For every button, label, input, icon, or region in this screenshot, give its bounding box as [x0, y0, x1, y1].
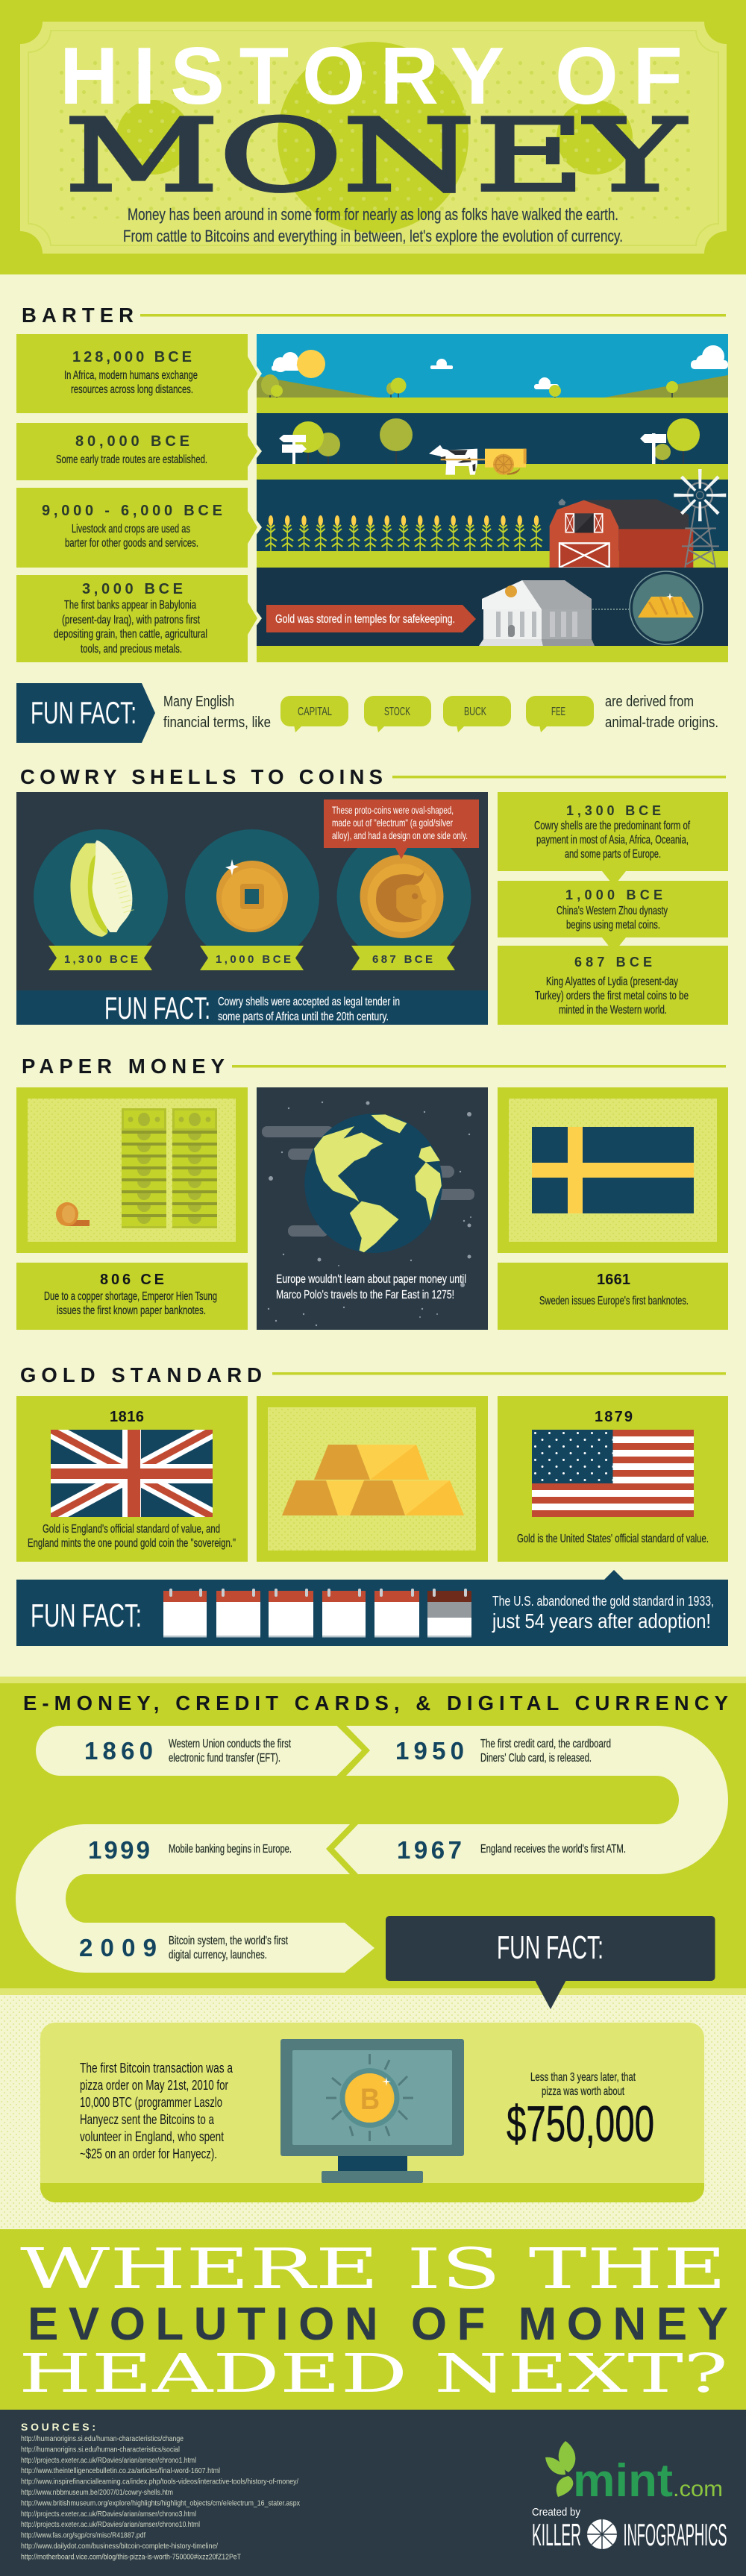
sources: SOURCES: [21, 2421, 95, 2433]
sources: http://humanorigins.si.edu/human-characteristics/social [21, 2445, 180, 2454]
caption [276, 1273, 466, 1301]
cream page background [0, 274, 746, 1677]
milestone: 1967: England receives the world's first ATM. [480, 1843, 626, 1856]
description [65, 523, 198, 550]
logo: Killer Infographics: Created by [532, 2506, 580, 2519]
milestone: 1950: Diners' Club card, is released. [480, 1752, 592, 1765]
sources: http://www.theintelligencebulletin.co.za/articles/final-word-1607.html [21, 2466, 220, 2475]
description: China's Western Zhou dynasty [557, 905, 668, 917]
icon: calendar row [163, 1589, 471, 1638]
fun fact: animal-trade terms: FUN FACT: [31, 695, 137, 730]
callout: gold stored in temples: Gold was stored in temples for safekeeping. [275, 613, 455, 626]
intro text: From cattle to Bitcoins and everything in between, let's explore the evolution of currency. [123, 227, 623, 245]
logo: mint.com: mint [573, 2455, 673, 2507]
ribbon: 687 BCE [351, 946, 455, 970]
heading: Gold standard: GOLD STANDARD [20, 1363, 262, 1386]
milestone: 1967: 1967 [397, 1836, 462, 1864]
milestone: 1999: 1999 [88, 1836, 150, 1864]
year: 687 BCE [574, 955, 652, 970]
description: depositing grain, then cattle, agricultural [54, 628, 207, 641]
intro text [123, 205, 623, 245]
term bubble: buck: BUCK [464, 706, 486, 718]
year: 80,000 BCE [75, 433, 189, 450]
sources: http://humanorigins.si.edu/human-characteristics/change [21, 2434, 184, 2443]
logo: Killer Infographics [532, 2506, 727, 2552]
fun fact: animal-trade terms: financial terms, like [163, 714, 271, 731]
milestone: 1967 [397, 1836, 626, 1864]
description: Some early trade routes are established. [56, 453, 207, 466]
sources: http://www.nbbmuseum.be/2007/01/cowry-shells.htm [21, 2488, 173, 2497]
sources: http://projects.exeter.ac.uk/RDavies/arian/amser/chrono10.html [21, 2520, 200, 2529]
fun fact: animal-trade terms: animal-trade origins. [605, 714, 718, 731]
fun fact: animal-trade terms [16, 683, 718, 743]
heading: E-money: E-MONEY, CREDIT CARDS, & DIGITAL CURRENCY [23, 1691, 728, 1715]
closing banner [0, 2229, 746, 2410]
banknote background [20, 22, 727, 254]
footer [0, 2410, 746, 2576]
panel: 1661: Sweden issues Europe's first banknotes. [539, 1295, 689, 1307]
text: pizza value [507, 2071, 654, 2152]
icon: square-hole coin [185, 829, 319, 964]
panel: 806 CE: Due to a copper shortage, Emperor Hien Tsung [44, 1290, 217, 1303]
year: 1,300 BCE [566, 803, 661, 818]
panel: 128,000 BCE [16, 334, 262, 413]
caption: Marco Polo's travels to the Far East in 1275! [276, 1289, 454, 1301]
callout: proto-coins: made out of "electrum" (a gold/silver [332, 817, 453, 829]
sources [21, 2421, 301, 2562]
panel: 1816 England: 1816 [110, 1409, 144, 1425]
header banner [0, 0, 746, 274]
logo: Killer Infographics: KILLER [532, 2517, 581, 2552]
panel: 806 CE: 806 CE [100, 1272, 164, 1288]
sources: http://motherboard.vice.com/blog/this-pizza-is-worth-750000#ixzz20fZ12PeT [21, 2553, 241, 2562]
text: first transaction [80, 2061, 233, 2161]
snake path [16, 1726, 728, 1973]
panel: Marco Polo globe [257, 1087, 488, 1330]
icon: trees [261, 374, 678, 398]
icon: gold vault circle [630, 571, 703, 644]
text: where is the: WHERE IS THE [20, 2236, 727, 2302]
logo: mint.com [545, 2441, 723, 2507]
icon: paper roll [56, 1202, 90, 1226]
icon: trees [292, 418, 700, 464]
fun fact: animal-trade terms: are derived from [605, 694, 694, 710]
milestone: 1860 [84, 1737, 291, 1765]
panel: cowry shells and coins [16, 792, 488, 1025]
icon: sun and clouds [272, 345, 728, 389]
text: first transaction: pizza order on May 21st, 2010 for [80, 2078, 228, 2093]
year: 1,000 BCE [565, 888, 662, 902]
icon: banknote stacks [122, 1108, 217, 1228]
heading: Paper money: PAPER MONEY [22, 1055, 225, 1078]
year: 9,000 - 6,000 BCE [42, 503, 222, 519]
panel: barter scene 128,000 BCE [257, 334, 728, 413]
description: Cowry shells are the predominant form of [534, 820, 691, 832]
term bubble: stock [364, 696, 431, 732]
milestone: 1950: The first credit card, the cardboard [480, 1738, 611, 1750]
description: (present-day Iraq), with patrons first [62, 614, 201, 626]
icon: cloud bars [262, 1126, 474, 1237]
description [64, 369, 198, 396]
term bubble: fee: FEE [551, 706, 565, 718]
term bubble: buck [443, 696, 511, 732]
ribbon: 1,300 BCE [48, 946, 152, 970]
sources: http://www.inspirefinanciallearning.ca/index.php/tools-videos/interactive-tools/history-of-money/ [21, 2478, 298, 2487]
icon: barn and windmill [550, 469, 726, 568]
logo: mint.com: .com [673, 2477, 723, 2501]
fun fact: gold standard abandoned: just 54 years after adoption! [492, 1609, 711, 1633]
ribbon: 687 BCE: 687 BCE [372, 953, 433, 966]
title: History of: HISTORY OF [60, 31, 683, 122]
fun fact: gold standard abandoned [16, 1570, 728, 1646]
panel: pizza bitcoin story [40, 2023, 704, 2202]
heading: Cowry shells to coins [20, 765, 726, 788]
milestone: 1860: 1860 [84, 1737, 153, 1765]
panel: 1661 [498, 1263, 728, 1330]
year: 3,000 BCE [82, 581, 183, 597]
icon: globe [304, 1113, 442, 1253]
panel: 1816 England: England mints the one pound gold coin the "sovereign." [28, 1537, 236, 1550]
ribbon: 1,000 BCE [200, 946, 304, 970]
panel: banknotes illustration [16, 1087, 248, 1253]
fun fact: speech bubble: FUN FACT: [497, 1929, 604, 1966]
icon: monitor with bitcoin: B [360, 2083, 380, 2116]
milestone: 2009 [79, 1934, 289, 1961]
panel: barter scene 3,000 BCE [257, 568, 728, 662]
milestone: 1999: Mobile banking begins in Europe. [169, 1843, 292, 1856]
callout: proto-coins: These proto-coins were oval-shaped, [332, 804, 454, 816]
fun fact: speech bubble [386, 1916, 715, 2009]
milestone: 1950: 1950 [395, 1737, 464, 1765]
icon: Union flag [51, 1430, 213, 1517]
term bubble: capital: CAPITAL [298, 706, 332, 718]
text: first transaction: volunteer in England, who spent [80, 2129, 224, 2144]
description: tools, and precious metals. [81, 643, 182, 656]
icon: temple bank [479, 580, 629, 646]
section: pizza background [0, 1988, 746, 2229]
panel: barter scene 9,000 BCE [257, 469, 728, 568]
heading: Cowry shells to coins: COWRY SHELLS TO COINS [20, 765, 383, 788]
callout: gold stored in temples [266, 605, 476, 632]
callout: proto-coins: alloy), and had a design on one side only. [332, 829, 468, 841]
description [54, 599, 207, 656]
sources: http://projects.exeter.ac.uk/RDavies/arian/amser/chrono1.html [21, 2456, 196, 2465]
icon: monitor with bitcoin [280, 2039, 464, 2183]
milestone: 1950 [395, 1737, 611, 1765]
fun fact: cowry legal tender: FUN FACT: [104, 990, 210, 1025]
fun fact: gold standard abandoned: FUN FACT: [31, 1598, 142, 1634]
text: pizza value: Less than 3 years later, that [530, 2071, 636, 2084]
icon: corn rows [265, 515, 542, 551]
stars [268, 1101, 471, 1326]
panel: 80,000 BCE [16, 423, 262, 480]
icon: gold bar stack [282, 1445, 464, 1515]
fun fact: cowry legal tender: Cowry shells were accepted as legal tender in [218, 996, 400, 1008]
description: and some parts of Europe. [565, 848, 661, 861]
sources: http://www.britishmuseum.org/explore/highlights/highlight_objects/cm/e/electrum_16_stater.aspx [21, 2498, 301, 2507]
text: pizza value: pizza was worth about [542, 2085, 625, 2098]
text: headed next: HEADED NEXT? [19, 2343, 728, 2404]
callout: proto-coins [324, 799, 479, 859]
icon: flag of Sweden [532, 1127, 694, 1213]
text: first transaction: 10,000 BTC (programmer Laszlo [80, 2095, 222, 2110]
description: resources across long distances. [71, 383, 193, 396]
panel: cowry timeline [498, 792, 728, 1025]
text: first transaction: ~$25 on an order for Hanyecz). [80, 2146, 217, 2161]
ribbon: 1,000 BCE: 1,000 BCE [216, 953, 291, 966]
panel: 1816 England [16, 1396, 248, 1562]
year: 128,000 BCE [72, 349, 192, 365]
panel: 3,000 BCE [16, 575, 262, 662]
text: evolution of money: EVOLUTION OF MONEY [28, 2299, 728, 2350]
icon: head coin [337, 829, 471, 964]
panel: 806 CE [16, 1263, 248, 1330]
term bubble: capital [280, 696, 348, 732]
panel: gold bars [257, 1396, 488, 1562]
heading: Gold standard [20, 1363, 726, 1386]
panel: 1661: 1661 [597, 1272, 630, 1288]
icon: US flag [532, 1430, 694, 1517]
heading: Barter: BARTER [22, 304, 134, 327]
sources: http://www.dailydot.com/business/bitcoin-complete-history-timeline/ [21, 2542, 218, 2551]
description: barter for other goods and services. [65, 537, 198, 550]
text: first transaction: Hanyecz sent the Bitcoins to a [80, 2112, 215, 2127]
milestone: 2009: Bitcoin system, the world's first [169, 1935, 289, 1947]
section: e-money timeline [0, 1677, 746, 1988]
description [557, 905, 668, 932]
title: Money: MONEY [64, 98, 686, 214]
description: Livestock and crops are used as [72, 523, 190, 535]
fun fact: cowry legal tender: some parts of Africa until the 20th century. [218, 1011, 389, 1023]
sources: http://projects.exeter.ac.uk/RDavies/arian/amser/chrono3.html [21, 2510, 196, 2519]
description: begins using metal coins. [566, 919, 660, 932]
icon: cowry shell [34, 829, 168, 964]
milestone: 1860: Western Union conducts the first [169, 1738, 291, 1750]
icon: cow and cart [429, 445, 527, 475]
panel: 1816 England: Gold is England's official standard of value, and [43, 1523, 220, 1536]
panel: Sweden flag [498, 1087, 728, 1253]
milestone: 1860: electronic fund transfer (EFT). [169, 1752, 280, 1765]
heading: Barter [22, 304, 726, 327]
milestone: 2009: 2009 [79, 1934, 157, 1961]
caption: Europe wouldn't learn about paper money until [276, 1273, 466, 1286]
icon: signposts [279, 433, 666, 464]
panel: 806 CE: issues the first known paper banknotes. [57, 1304, 206, 1317]
sources: http://www.fas.org/sgp/crs/misc/R41887.pdf [21, 2531, 145, 2540]
term bubble: stock: STOCK [384, 706, 410, 718]
ribbon: 1,300 BCE: 1,300 BCE [64, 953, 138, 966]
panel: 9,000 - 6,000 BCE [16, 488, 262, 568]
fun fact: animal-trade terms: Many English [163, 694, 234, 710]
term bubble: fee [526, 696, 594, 732]
panel: barter scene 80,000 BCE [257, 413, 728, 480]
panel: 1879 United States [498, 1396, 728, 1562]
panel: 1879 United States: 1879 [595, 1409, 633, 1425]
intro text: Money has been around in some form for nearly as long as folks have walked the earth. [128, 205, 618, 224]
heading: Paper money [22, 1055, 726, 1078]
hills [257, 375, 728, 398]
description [535, 976, 689, 1017]
description [534, 820, 691, 861]
text: pizza value: $750,000 [507, 2096, 654, 2152]
milestone: 2009: digital currency, launches. [169, 1949, 267, 1961]
description: King Alyattes of Lydia (present-day [546, 976, 678, 988]
description: The first banks appear in Babylonia [64, 599, 196, 612]
description: Turkey) orders the first metal coins to be [535, 990, 689, 1002]
description: payment in most of Asia, Africa, Oceania, [536, 834, 689, 846]
description: minted in the Western world. [559, 1004, 667, 1017]
text: first transaction: The first Bitcoin transaction was a [80, 2061, 233, 2076]
description: In Africa, modern humans exchange [64, 369, 198, 382]
fun fact: cowry legal tender [16, 990, 488, 1025]
milestone: 1999 [88, 1836, 292, 1864]
